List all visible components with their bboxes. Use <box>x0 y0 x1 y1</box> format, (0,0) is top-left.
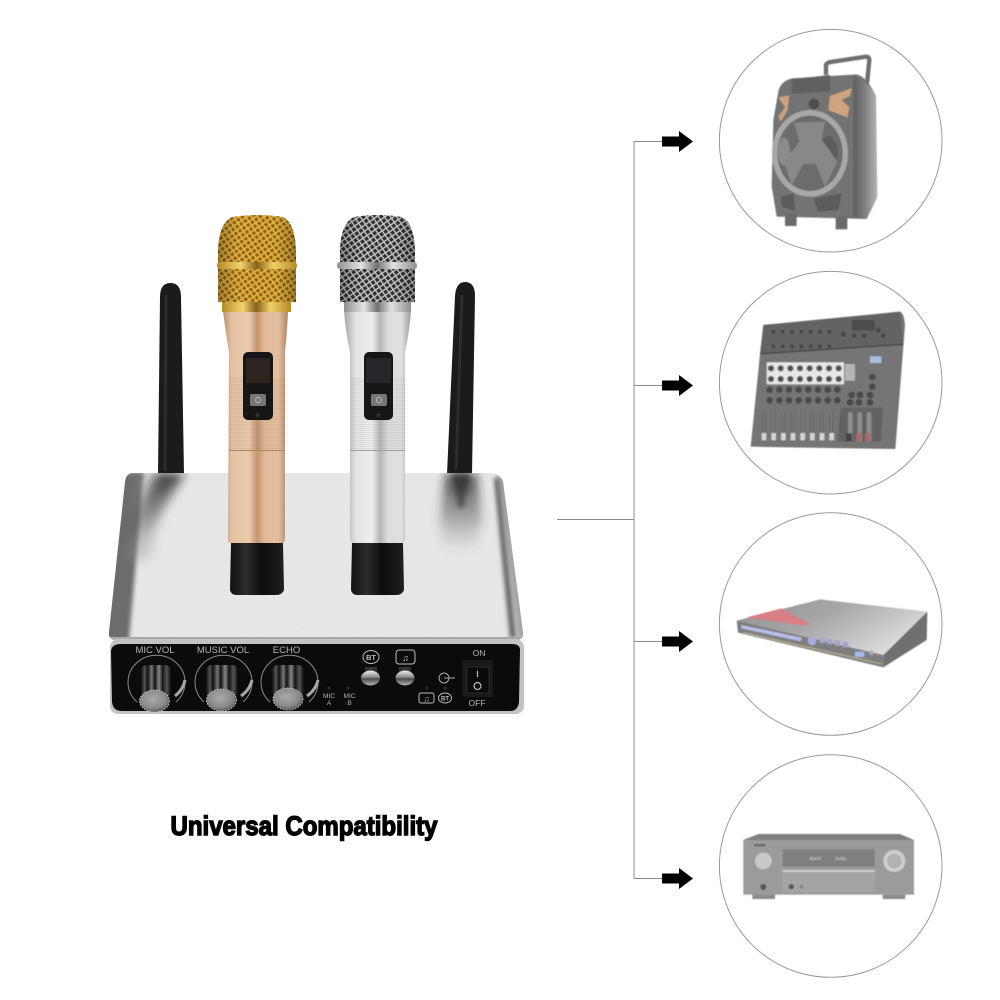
antenna: left <box>158 283 184 474</box>
plate shading and edges <box>100 470 530 642</box>
connector lines <box>557 142 664 878</box>
switch window <box>364 352 393 420</box>
circle: speaker <box>719 29 942 252</box>
speaker device <box>772 57 877 229</box>
dvd device <box>737 599 927 667</box>
mic LEDs <box>328 686 446 690</box>
arrow: receiver <box>662 868 693 889</box>
arrow: speaker <box>662 131 693 152</box>
toggle: BT <box>361 650 380 686</box>
panel labels: ON <box>473 648 485 658</box>
mode icons <box>419 693 452 704</box>
toggle: mic music <box>396 650 415 686</box>
circle: mixer <box>719 271 942 494</box>
mode icons: ♫ <box>424 694 430 704</box>
switch window <box>243 352 273 420</box>
arrow: dvd player <box>662 631 693 652</box>
toggle: BT: BT <box>366 653 376 662</box>
head <box>218 215 296 302</box>
toggle: mic music: ♫ <box>402 653 409 663</box>
receiver device: Dolby <box>835 856 847 861</box>
head <box>340 215 415 302</box>
antenna: right <box>447 282 475 474</box>
body <box>223 311 288 543</box>
knob: music vol <box>195 655 252 711</box>
title: Universal Compatibility <box>170 811 438 841</box>
black panel <box>111 644 520 711</box>
arrow: mixer <box>662 375 693 396</box>
front bezel <box>110 639 524 714</box>
circle: receiver <box>719 755 942 977</box>
microphone: silver <box>337 215 417 595</box>
circle: dvd player <box>719 513 942 735</box>
knob: mic vol <box>128 655 185 712</box>
receiver base <box>100 470 530 714</box>
power switch <box>462 660 493 697</box>
panel labels: A <box>327 700 332 707</box>
panel labels: MIC <box>344 693 356 700</box>
knob: echo <box>261 655 318 710</box>
mode icons: BT <box>441 696 449 702</box>
grip <box>351 543 404 595</box>
panel labels <box>135 645 486 708</box>
icon: input <box>439 673 455 683</box>
microphone: gold <box>217 215 297 595</box>
receiver device <box>743 834 914 899</box>
panel labels: ECHO <box>273 645 300 656</box>
top plate <box>109 473 523 640</box>
panel labels: MIC VOL <box>135 645 175 656</box>
mixer device <box>751 312 905 449</box>
panel labels: MIC <box>323 693 335 700</box>
grip <box>230 543 284 595</box>
panel labels: B <box>347 700 352 707</box>
body <box>344 311 411 543</box>
panel labels: OFF <box>468 698 486 708</box>
receiver device: dtsHD <box>809 856 821 861</box>
panel labels: MUSIC VOL <box>197 645 249 656</box>
